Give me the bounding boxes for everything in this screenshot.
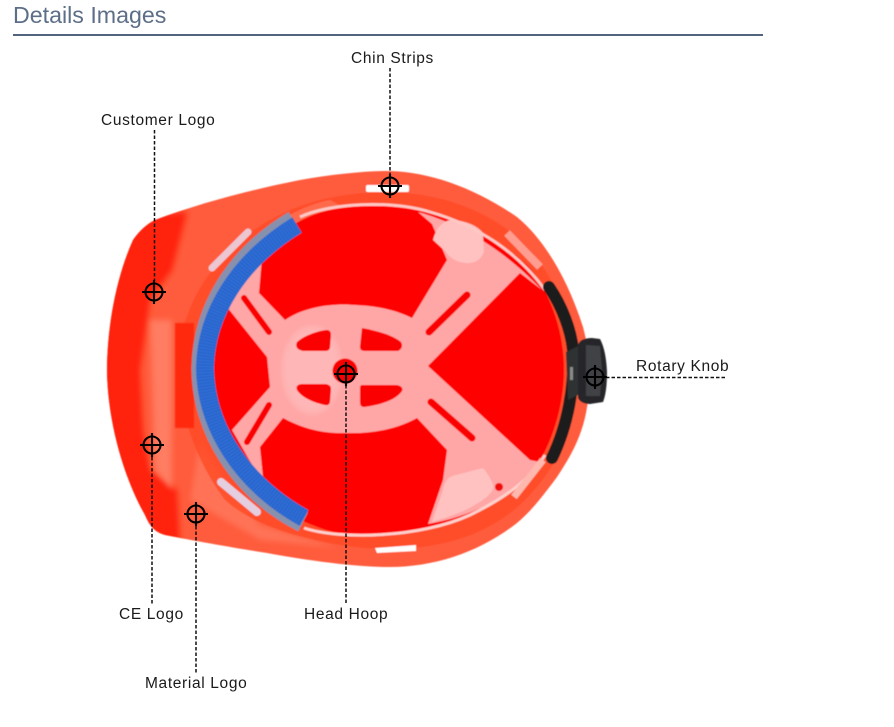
helmet shell bbox=[95, 171, 607, 567]
rotary knob shell bbox=[566, 346, 578, 400]
marker: head hoop bbox=[334, 362, 358, 386]
long slots bbox=[244, 298, 269, 442]
label: rotary knob: Rotary Knob bbox=[636, 358, 729, 375]
visor light panel bbox=[150, 320, 172, 490]
label: head hoop: Head Hoop bbox=[304, 606, 388, 623]
marker: rotary knob bbox=[583, 365, 607, 389]
hub slots bbox=[296, 330, 331, 351]
marker: chin strips bbox=[378, 174, 402, 198]
callout labels bbox=[101, 50, 729, 692]
leader lines bbox=[152, 68, 727, 673]
inner dome bbox=[213, 205, 564, 536]
marker: material logo bbox=[184, 502, 208, 526]
visor dark edge bbox=[106, 210, 324, 546]
cradle pads bbox=[433, 220, 484, 263]
ratchet strap bbox=[549, 287, 573, 458]
centre hole bbox=[332, 358, 358, 384]
clips bbox=[212, 232, 248, 268]
label: material logo: Material Logo bbox=[145, 675, 247, 692]
label: CE logo: CE Logo bbox=[119, 606, 184, 623]
title: Details Images bbox=[13, 2, 166, 28]
label: customer logo: Customer Logo bbox=[101, 112, 215, 129]
head cradle bbox=[227, 212, 542, 524]
target markers bbox=[140, 174, 607, 526]
marker: customer logo bbox=[142, 280, 166, 304]
marker: CE logo bbox=[140, 433, 164, 457]
helmet diagram bbox=[102, 52, 728, 692]
label: chin strips: Chin Strips bbox=[351, 50, 434, 67]
white rim band bbox=[300, 205, 545, 290]
head band bbox=[202, 221, 303, 522]
cradle centre glow bbox=[282, 326, 342, 414]
inner dark band bbox=[178, 192, 576, 549]
white slots bbox=[366, 185, 409, 192]
